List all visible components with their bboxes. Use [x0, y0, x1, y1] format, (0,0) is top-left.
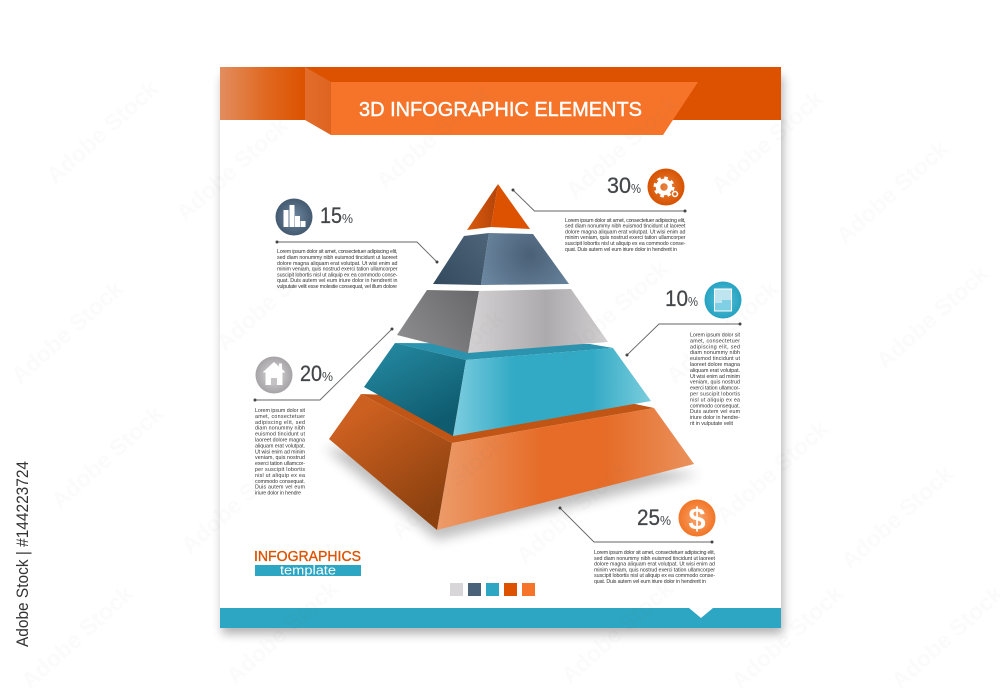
- watermark: Adobe Stock: [386, 305, 508, 419]
- callout: 30%: 30: [607, 173, 631, 198]
- text block: nisl ut aliquip ex ea: [255, 473, 305, 479]
- stock id caption: Adobe Stock | #144223724: [13, 461, 32, 647]
- callout: 20%: %: [322, 370, 333, 384]
- title ribbon: [305, 67, 698, 135]
- text block: quat. Duis autem vel eum iriure dolor in hendrerit in: [277, 278, 398, 284]
- text block: Lorem ipsum dolor sit amet, consectetuer adipiscing elit,: [594, 550, 715, 556]
- tier: navy: [433, 233, 569, 285]
- watermark: Adobe Stock: [706, 85, 828, 199]
- text block: laoreet dolore magna: [690, 362, 740, 368]
- text block: Duis autem vel eum: [255, 485, 306, 491]
- text block: suscipit lobortis nisl ut aliquip ex ea commodo conse-: [565, 241, 686, 247]
- watermark: Adobe Stock: [556, 575, 678, 689]
- text block: minim veniam, quis nostrud exerci tation ullamcorper: [277, 267, 398, 273]
- icon: dollar: $: [688, 501, 706, 536]
- logo: infographics template: template: [280, 562, 336, 578]
- callout: 30%: %: [631, 182, 641, 196]
- text block: aliquam erat volutpat.: [255, 443, 305, 449]
- text block: vulputate velit esse molestie consequat, vel illum dolore: [277, 284, 397, 290]
- text block: dolore magna aliquam erat volutpat. Ut wisi enim ad: [565, 229, 686, 235]
- text block: per suscipit lobortis: [690, 392, 740, 398]
- text block: amet, consectetuer: [690, 338, 740, 344]
- watermark: Adobe Stock: [46, 400, 168, 514]
- text block: veniam, quis nostrud: [255, 455, 305, 461]
- text block: [690, 332, 741, 427]
- icon: house: [256, 356, 292, 394]
- tier: orange base: [329, 394, 694, 530]
- watermark: Adobe Stock: [221, 575, 343, 689]
- text block: Lorem ipsum dolor sit: [690, 332, 741, 338]
- text block: Lorem ipsum dolor sit: [255, 408, 306, 414]
- colour swatches: [450, 583, 535, 596]
- watermark: Adobe Stock: [171, 112, 293, 226]
- callout: 20%: [254, 328, 394, 497]
- text block: euismod tincidunt ut: [255, 432, 306, 438]
- text block: [594, 550, 716, 585]
- logo: infographics template: INFOGRAPHICS: [254, 548, 361, 565]
- text block: euismod tincidunt ut: [690, 356, 741, 362]
- callout: 25%: %: [660, 514, 671, 528]
- pyramid shadow: [325, 448, 700, 540]
- text block: minim veniam, quis nostrud exerci tation ullamcorper: [565, 235, 686, 241]
- text block: exerci tation ullamcor-: [690, 386, 740, 392]
- text block: exerci tation ullamcor-: [255, 461, 305, 467]
- callout: 10%: [626, 282, 742, 427]
- text block: quat. Duis autem vel eum iriure dolor in hendrerit in: [565, 247, 677, 253]
- tier: gray: [397, 289, 608, 353]
- watermark: Adobe Stock: [176, 445, 298, 559]
- watermark: Adobe Stock: [41, 75, 163, 189]
- text block: dolore magna aliquam erat volutpat. Ut wisi enim ad: [594, 562, 715, 568]
- text block: suscipit lobortis nisl ut aliquip ex ea commodo conse-: [277, 272, 398, 278]
- text block: [565, 218, 686, 253]
- callout: 15%: %: [342, 212, 353, 226]
- callout: 10%: 10: [665, 286, 688, 311]
- panel: page: [220, 67, 781, 628]
- text block: rit in vulputate velit: [690, 421, 734, 427]
- callout: 25%: [558, 500, 716, 585]
- text block: iriure dolor in hendre-: [690, 415, 740, 421]
- text block: sed diam nonummy nibh euismod tincidunt ut laoreet: [594, 556, 716, 562]
- callout: 20%: 20: [300, 361, 322, 386]
- header band: [220, 67, 781, 120]
- text block: [255, 408, 306, 497]
- watermark: Adobe Stock: [871, 260, 993, 374]
- text block: commodo consequat.: [255, 479, 305, 485]
- text block: sed diam nonummy nibh euismod tincidunt ut laoreet: [565, 224, 686, 230]
- callout: 25%: 25: [637, 505, 660, 530]
- text block: Duis autem vel eum: [690, 409, 741, 415]
- icon: dollar: [678, 500, 716, 536]
- watermark: Adobe Stock: [561, 90, 683, 204]
- watermark: Adobe Stock: [6, 275, 128, 389]
- watermark: Adobe Stock: [386, 430, 508, 544]
- text block: suscipit lobortis nisl ut aliquip ex ea commodo conse-: [594, 573, 715, 579]
- pyramid chart: [329, 184, 694, 530]
- text block: adipiscing elit, sed: [255, 420, 305, 426]
- text block: quat. Duis autem vel eum iriure dolor in hendrerit in: [594, 579, 706, 585]
- text block: diam nonummy nibh: [690, 350, 740, 356]
- watermark: Adobe Stock: [211, 242, 333, 356]
- text block: Ut wisi enim ad minim: [255, 449, 306, 455]
- text block: [277, 249, 398, 290]
- text block: iriure dolor in hendre: [255, 491, 301, 497]
- text block: commodo consequat.: [690, 403, 740, 409]
- text block: Lorem ipsum dolor sit amet, consectetuer adipiscing elit,: [565, 218, 686, 224]
- logo: infographics template: [254, 548, 361, 578]
- text block: adipiscing elit, sed: [690, 344, 740, 350]
- text block: aliquam erat volutpat.: [690, 368, 740, 374]
- callout: 15%: 15: [320, 203, 342, 228]
- watermark: Adobe Stock: [551, 255, 673, 369]
- watermark: Adobe Stock: [831, 135, 953, 249]
- text block: Ut wisi enim ad minim: [690, 374, 741, 380]
- text block: laoreet dolore magna: [255, 438, 305, 444]
- watermark: Adobe Stock: [371, 80, 493, 194]
- text block: dolore magna aliquam erat volutpat. Ut wisi enim ad: [277, 261, 398, 267]
- icon: bar chart: [276, 198, 312, 236]
- icon: gears: [648, 168, 684, 206]
- tier: teal: [364, 343, 651, 436]
- text block: per suscipit lobortis: [255, 467, 305, 473]
- text block: diam nonummy nibh: [255, 426, 305, 432]
- text block: veniam, quis nostrud: [690, 380, 740, 386]
- callout: 30%: [512, 168, 686, 253]
- watermark: Adobe Stock: [726, 580, 848, 694]
- footer band: [220, 608, 781, 628]
- watermark: Adobe Stock: [511, 455, 633, 569]
- icon: book: [704, 282, 742, 318]
- text block: sed diam nonummy nibh euismod tincidunt ut laoreet: [277, 255, 398, 261]
- watermark: Adobe Stock: [661, 275, 783, 389]
- text block: minim veniam, quis nostrud exerci tation ullamcorper: [594, 567, 715, 573]
- panel shadow: [222, 76, 783, 634]
- text block: nisl ut aliquip ex ea: [690, 397, 740, 403]
- watermark: Adobe Stock: [16, 580, 138, 694]
- watermark: Adobe Stock: [836, 460, 958, 574]
- title ribbon: 3D INFOGRAPHIC ELEMENTS: [359, 98, 642, 121]
- callout: 10%: %: [688, 295, 698, 309]
- tier: top orange: [467, 184, 530, 230]
- watermark: Adobe Stock: [711, 415, 833, 529]
- text block: amet, consectetuer: [255, 414, 305, 420]
- text block: Lorem ipsum dolor sit amet, consectetuer adipiscing elit,: [277, 249, 398, 255]
- callout: 15%: [276, 198, 438, 290]
